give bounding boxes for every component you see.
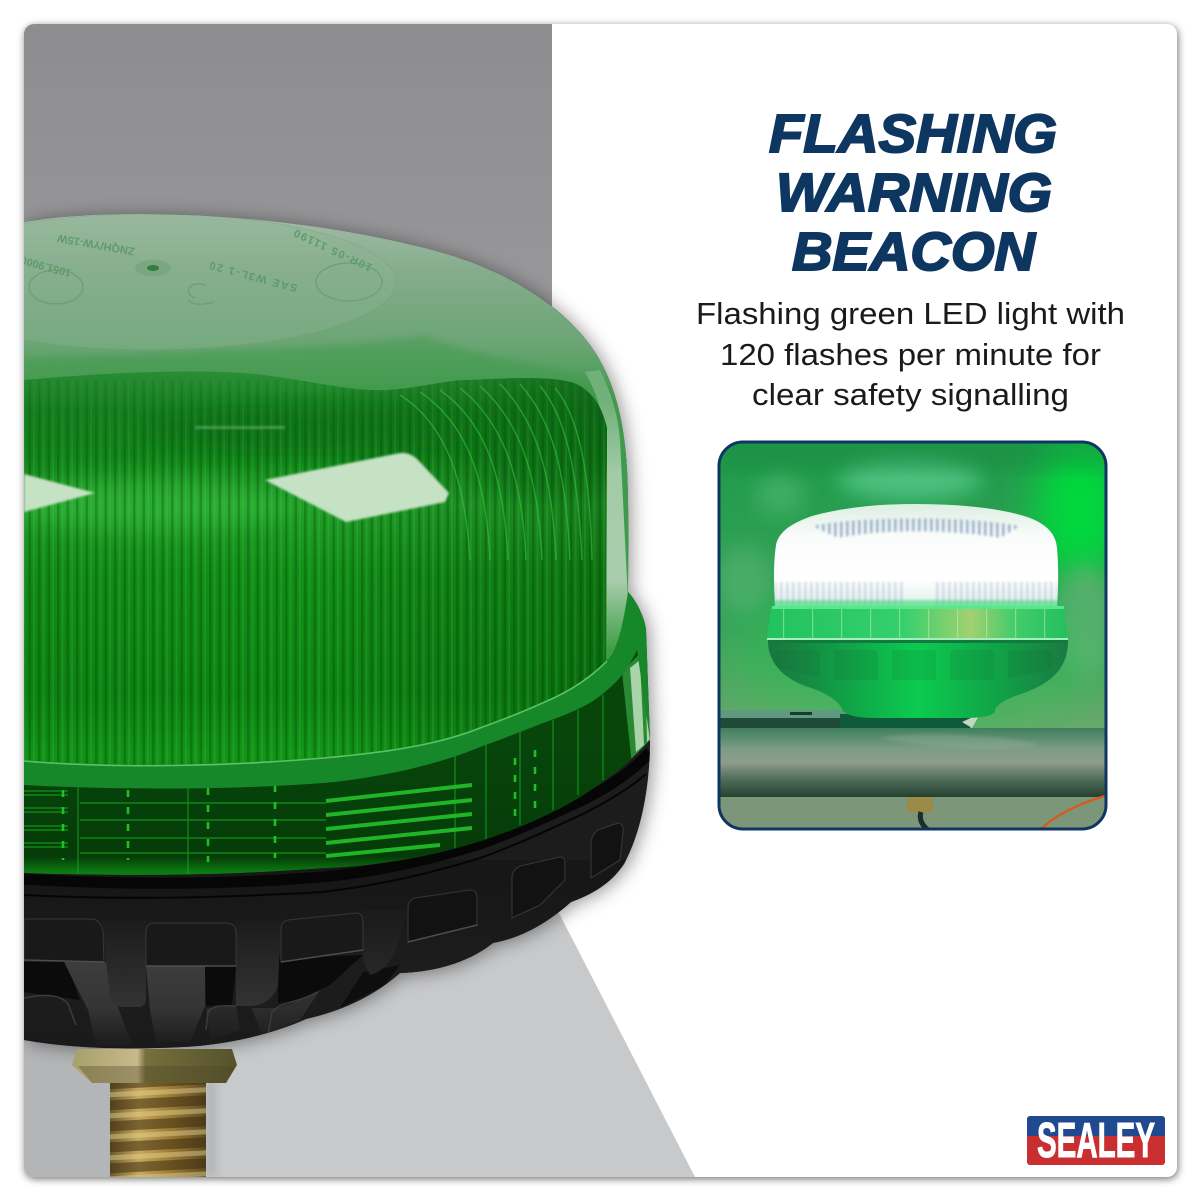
green ring — [767, 606, 1068, 643]
orange wire — [1040, 795, 1108, 830]
front tube — [719, 728, 1106, 797]
rear rail — [720, 710, 978, 728]
beacon silhouette shadow — [24, 214, 650, 1048]
grey pillars — [64, 962, 320, 1034]
bright vertical ticks — [63, 750, 535, 862]
embossed dimple — [135, 260, 171, 276]
collar lip — [24, 585, 654, 885]
green lens dome — [24, 214, 628, 765]
collar highlight — [24, 661, 607, 766]
beacon product photo — [0, 200, 664, 1177]
glare right — [265, 453, 449, 522]
glare left — [24, 474, 95, 512]
title: FLASHING — [769, 104, 1057, 164]
title: BEACON — [792, 222, 1036, 282]
embossed lens text: 1051.9000 — [19, 254, 73, 279]
rim edge — [585, 370, 628, 644]
dim reflections — [24, 791, 326, 853]
embossed lens text: SAE W3L-1 20 — [207, 258, 299, 294]
lens collar ring — [24, 585, 654, 885]
description text: clear safety signalling — [752, 377, 1069, 412]
pale streaks — [195, 426, 285, 429]
lower rib band — [775, 582, 905, 606]
green base — [768, 641, 1068, 718]
rubber base — [24, 752, 664, 1060]
threaded bolt — [110, 1083, 206, 1177]
collar vertical lines — [78, 695, 603, 875]
base tongues — [106, 948, 391, 1007]
blurred green background — [720, 444, 1104, 728]
curved highlight lines — [400, 384, 592, 560]
embossed lens text: ZNQH/YW-15W — [56, 231, 136, 257]
embossed lens markings — [29, 263, 382, 304]
title — [769, 104, 1057, 282]
dark lens body — [24, 372, 607, 765]
black gasket — [24, 752, 650, 883]
lower background strip — [719, 797, 1106, 830]
lower base recesses — [24, 955, 400, 1008]
description text: 120 flashes per minute for — [720, 337, 1101, 372]
embossed lens text: 10R-05 11190 — [291, 226, 374, 273]
embossed disc — [0, 214, 396, 350]
collar interior — [24, 640, 654, 885]
pocket lower rims — [24, 925, 477, 966]
title: WARNING — [776, 163, 1052, 223]
description text: Flashing green LED light with — [696, 296, 1125, 331]
base pockets — [24, 823, 623, 966]
upper rib band — [812, 518, 1020, 538]
glowing white dome — [770, 500, 1065, 615]
mounting nut — [72, 1049, 237, 1083]
shoulder band — [24, 335, 586, 382]
panel: grey backdrop — [24, 24, 695, 1180]
inset photo: beacon lit — [717, 440, 1125, 830]
lobe highlights — [24, 992, 318, 1034]
pale right strips — [622, 656, 650, 758]
bright reflections — [326, 785, 472, 856]
description text — [696, 296, 1125, 412]
embossed lens text — [24, 230, 372, 292]
threaded stud — [907, 797, 933, 830]
